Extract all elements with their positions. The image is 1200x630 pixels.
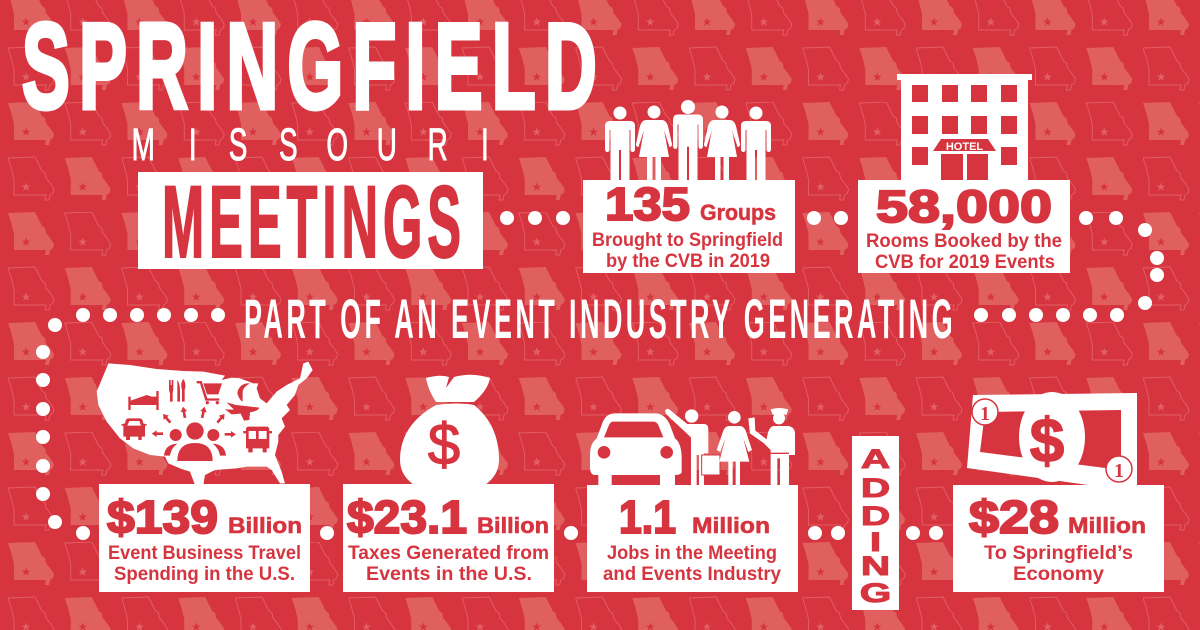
panel: 1.1 million: 1.1 bbox=[619, 491, 676, 543]
icon: car and travellers bbox=[590, 408, 795, 486]
icon: shopping cart bbox=[197, 381, 222, 401]
panel: 1.1 million bbox=[587, 485, 798, 592]
icon: money bag: $ bbox=[428, 412, 460, 477]
icon: dollar bill bbox=[967, 392, 1137, 485]
panel: $23.1 billion: $23.1 bbox=[347, 491, 467, 543]
badge: Adding: ADDING bbox=[860, 444, 891, 608]
panel: $23.1 billion: Taxes Generated from bbox=[348, 543, 549, 564]
icon: airplane bbox=[225, 402, 259, 421]
panel: $28 million: To Springfield’s bbox=[984, 543, 1133, 564]
icon: hotel bbox=[897, 74, 1032, 181]
title: Springfield: SPRINGFIELD bbox=[22, 0, 606, 134]
icon: bus bbox=[243, 427, 272, 452]
panel: 1.1 million: Million bbox=[692, 513, 770, 538]
panel: 58,000 rooms: CVB for 2019 Events bbox=[875, 252, 1055, 273]
badge: Adding bbox=[852, 436, 899, 610]
panel: $28 million bbox=[953, 485, 1164, 592]
dotted connector: top row bbox=[500, 211, 1164, 322]
panel: $28 million: Million bbox=[1068, 513, 1146, 538]
panel: $139 billion: Billion bbox=[228, 513, 302, 538]
icon: bed bbox=[128, 391, 159, 410]
panel: $139 billion: $139 bbox=[107, 491, 218, 543]
panel: $28 million: $28 bbox=[969, 491, 1059, 543]
icon: travellers bbox=[164, 422, 226, 461]
icon: money bag bbox=[400, 375, 499, 485]
panel: 135 groups bbox=[583, 178, 795, 273]
icon: hotel: HOTEL bbox=[946, 141, 983, 153]
panel: 58,000 rooms bbox=[858, 180, 1070, 273]
icon: fork knife spoon bbox=[169, 379, 185, 402]
badge: Meetings: MEETINGS bbox=[162, 165, 466, 279]
subtitle: Missouri: MISSOURI bbox=[132, 119, 489, 170]
panel: 135 groups: Brought to Springfield bbox=[592, 230, 783, 251]
panel: $23.1 billion: Billion bbox=[477, 513, 549, 538]
panel: 1.1 million: Jobs in the Meeting bbox=[607, 543, 777, 564]
panel: 135 groups: Groups bbox=[700, 200, 776, 225]
icon: dollar bill: 1 bbox=[1114, 460, 1124, 482]
panel: $28 million: Economy bbox=[1013, 564, 1104, 585]
panel: 58,000 rooms: 58,000 bbox=[876, 181, 1052, 232]
panel: $23.1 billion bbox=[343, 484, 554, 592]
icon: car bbox=[121, 418, 147, 440]
icon: arrows bbox=[152, 406, 236, 438]
panel: $23.1 billion: Events in the U.S. bbox=[366, 564, 532, 585]
dotted connector: left side and bottom row bbox=[36, 308, 943, 540]
icon: dollar bill: 1 bbox=[980, 403, 990, 425]
icon: USA map with travel spending bbox=[97, 362, 313, 485]
panel: 58,000 rooms: Rooms Booked by the bbox=[866, 231, 1062, 252]
panel: $139 billion: Spending in the U.S. bbox=[114, 564, 295, 585]
panel: 135 groups: by the CVB in 2019 bbox=[606, 251, 770, 272]
panel: $139 billion: Event Business Travel bbox=[108, 543, 301, 564]
icon: group of people bbox=[605, 100, 771, 180]
panel: 135 groups: 135 bbox=[605, 178, 690, 230]
badge: Meetings bbox=[138, 165, 483, 279]
panel: $139 billion bbox=[99, 484, 310, 592]
icon: dollar bill: $ bbox=[1030, 407, 1064, 476]
panel: 1.1 million: and Events Industry bbox=[603, 564, 781, 585]
